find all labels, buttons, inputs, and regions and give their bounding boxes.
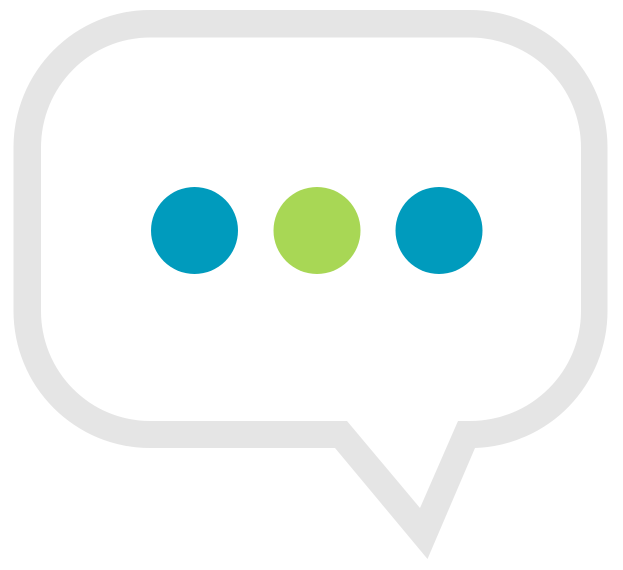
middle green dot xyxy=(274,187,360,274)
right blue dot xyxy=(396,187,482,274)
left blue dot xyxy=(151,187,238,274)
